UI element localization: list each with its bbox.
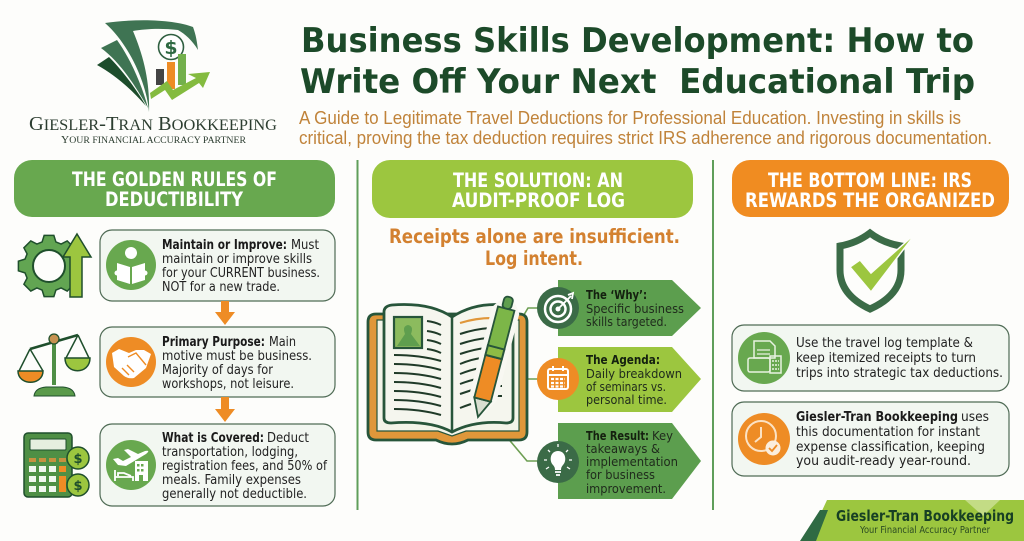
- title: [300, 21, 975, 101]
- callout: receipts alone: [389, 225, 680, 270]
- text: travel log template: Use the travel log template &: [796, 336, 973, 351]
- icon: pen: [463, 293, 523, 424]
- card: travel log template: [732, 325, 1009, 391]
- heading: the solution: [372, 160, 693, 218]
- text: what is covered: Deduct: [267, 431, 309, 446]
- callout: receipts alone: Log intent.: [485, 247, 583, 270]
- icon: target: [537, 287, 579, 329]
- icon: calculator and coins: $: [73, 479, 83, 494]
- heading: the bottom line: [732, 160, 1009, 217]
- card: Giesler-Tran documentation: [732, 402, 1009, 476]
- text: the result: implementation: [586, 455, 678, 470]
- logo: Giesler-Tran Bookkeeping: YOUR FINANCIAL ACCURACY PARTNER: [61, 135, 246, 146]
- text: Giesler-Tran documentation: uses: [961, 410, 989, 425]
- callout: receipts alone: Receipts alone are insufficient.: [389, 225, 680, 248]
- footer banner: [800, 500, 1024, 541]
- arrow: down 1: [215, 301, 235, 325]
- text: primary purpose: Primary Purpose:: [162, 335, 265, 350]
- text: Giesler-Tran documentation: expense classification, keeping: [796, 440, 985, 455]
- card: maintain or improve: [100, 230, 335, 301]
- title: Write Off Your Next Educational Trip: [300, 62, 975, 101]
- subtitle: A Guide to Legitimate Travel Deductions for Professional Education. Investing in skills is: [299, 107, 961, 128]
- connectors: [490, 308, 540, 461]
- heading: the bottom line: THE BOTTOM LINE: IRS: [768, 169, 972, 192]
- text: the result: takeaways &: [586, 442, 660, 457]
- text: the agenda: Daily breakdown: [586, 367, 682, 382]
- text: what is covered: [162, 431, 327, 502]
- icon: documents and receipts: [738, 332, 790, 384]
- text: Giesler-Tran documentation: this documentation for instant: [796, 425, 980, 440]
- panel: the bottom line: [732, 160, 1009, 476]
- text: Giesler-Tran documentation: you audit-ready year-round.: [796, 454, 971, 469]
- text: Giesler-Tran documentation: [796, 410, 989, 469]
- text: what is covered: registration fees, and 50% of: [162, 459, 327, 474]
- icon: person reading: [106, 240, 156, 290]
- icon: scales: [18, 334, 90, 396]
- subtitle: [299, 107, 992, 148]
- text: what is covered: What is Covered:: [162, 431, 264, 446]
- text: travel log template: keep itemized receipts to turn: [796, 351, 976, 366]
- text: primary purpose: [162, 335, 312, 392]
- icon: calculator and coins: $: [73, 452, 83, 467]
- heading: golden rules: [14, 160, 335, 217]
- logo: Giesler-Tran Bookkeeping: $: [164, 37, 178, 59]
- heading: golden rules: DEDUCTIBILITY: [105, 188, 244, 211]
- text: the why: skills targeted.: [586, 315, 667, 330]
- arrow: down 2: [215, 397, 235, 422]
- heading: the solution: THE SOLUTION: AN: [453, 169, 623, 192]
- text: the why: Specific business: [586, 302, 684, 317]
- text: the result: [586, 429, 678, 497]
- text: the result: for business: [586, 468, 655, 483]
- text: the why: [586, 288, 684, 330]
- text: the agenda: The Agenda:: [586, 353, 660, 368]
- text: what is covered: generally not deductible.: [162, 487, 307, 502]
- text: what is covered: meals. Family expenses: [162, 473, 301, 488]
- icon: shield with check: [836, 229, 916, 314]
- card: what is covered: [100, 424, 335, 506]
- text: maintain or improve: for your CURRENT business.: [162, 266, 320, 281]
- text: the result: improvement.: [586, 482, 666, 497]
- text: maintain or improve: [162, 238, 320, 295]
- text: primary purpose: workshops, not leisure.: [162, 377, 294, 392]
- text: maintain or improve: Maintain or Improve:: [162, 238, 287, 253]
- logo: Giesler-Tran Bookkeeping: GIESLER-TRAN BOOKKEEPING: [29, 113, 277, 135]
- tag: the agenda: [537, 347, 701, 412]
- text: what is covered: transportation, lodging,: [162, 445, 298, 460]
- logo: Giesler-Tran Bookkeeping: [29, 20, 277, 146]
- icon: plane, bed and hotel: [106, 440, 156, 490]
- heading: the solution: AUDIT-PROOF LOG: [452, 189, 625, 212]
- icon: open book and pen: [368, 293, 527, 444]
- text: primary purpose: Main: [269, 335, 296, 350]
- heading: golden rules: THE GOLDEN RULES OF: [72, 168, 277, 191]
- tag: the result: [537, 423, 701, 499]
- panel: the solution: [368, 160, 701, 499]
- text: travel log template: [796, 336, 1003, 381]
- footer banner: Your Financial Accuracy Partner: [859, 525, 990, 536]
- icon: handshake: [106, 337, 156, 387]
- text: the why: The ‘Why’:: [586, 288, 647, 303]
- text: primary purpose: Majority of days for: [162, 363, 274, 378]
- icon: calculator and coins: [24, 433, 89, 497]
- text: the result: Key: [652, 429, 673, 444]
- title: Business Skills Development: How to: [301, 21, 974, 60]
- text: the agenda: personal time.: [586, 393, 667, 408]
- text: maintain or improve: maintain or improve skills: [162, 252, 312, 267]
- text: maintain or improve: NOT for a new trade.: [162, 280, 280, 295]
- icon: calendar: [537, 358, 579, 400]
- panel: golden rules: [14, 160, 335, 506]
- text: travel log template: trips into strategic tax deductions.: [796, 366, 1003, 381]
- icon: light bulb: [537, 441, 579, 483]
- tag: the why: [537, 280, 701, 336]
- text: the result: The Result:: [586, 429, 649, 444]
- text: the agenda: [586, 353, 682, 408]
- text: maintain or improve: Must: [291, 238, 319, 253]
- text: the agenda: of seminars vs.: [586, 380, 666, 395]
- icon: gear and up arrow: [18, 234, 91, 297]
- text: Giesler-Tran documentation: Giesler-Tran Bookkeeping: [796, 410, 958, 425]
- icon: clock with check: [738, 413, 790, 465]
- text: primary purpose: motive must be business.: [162, 349, 312, 364]
- card: primary purpose: [100, 327, 335, 397]
